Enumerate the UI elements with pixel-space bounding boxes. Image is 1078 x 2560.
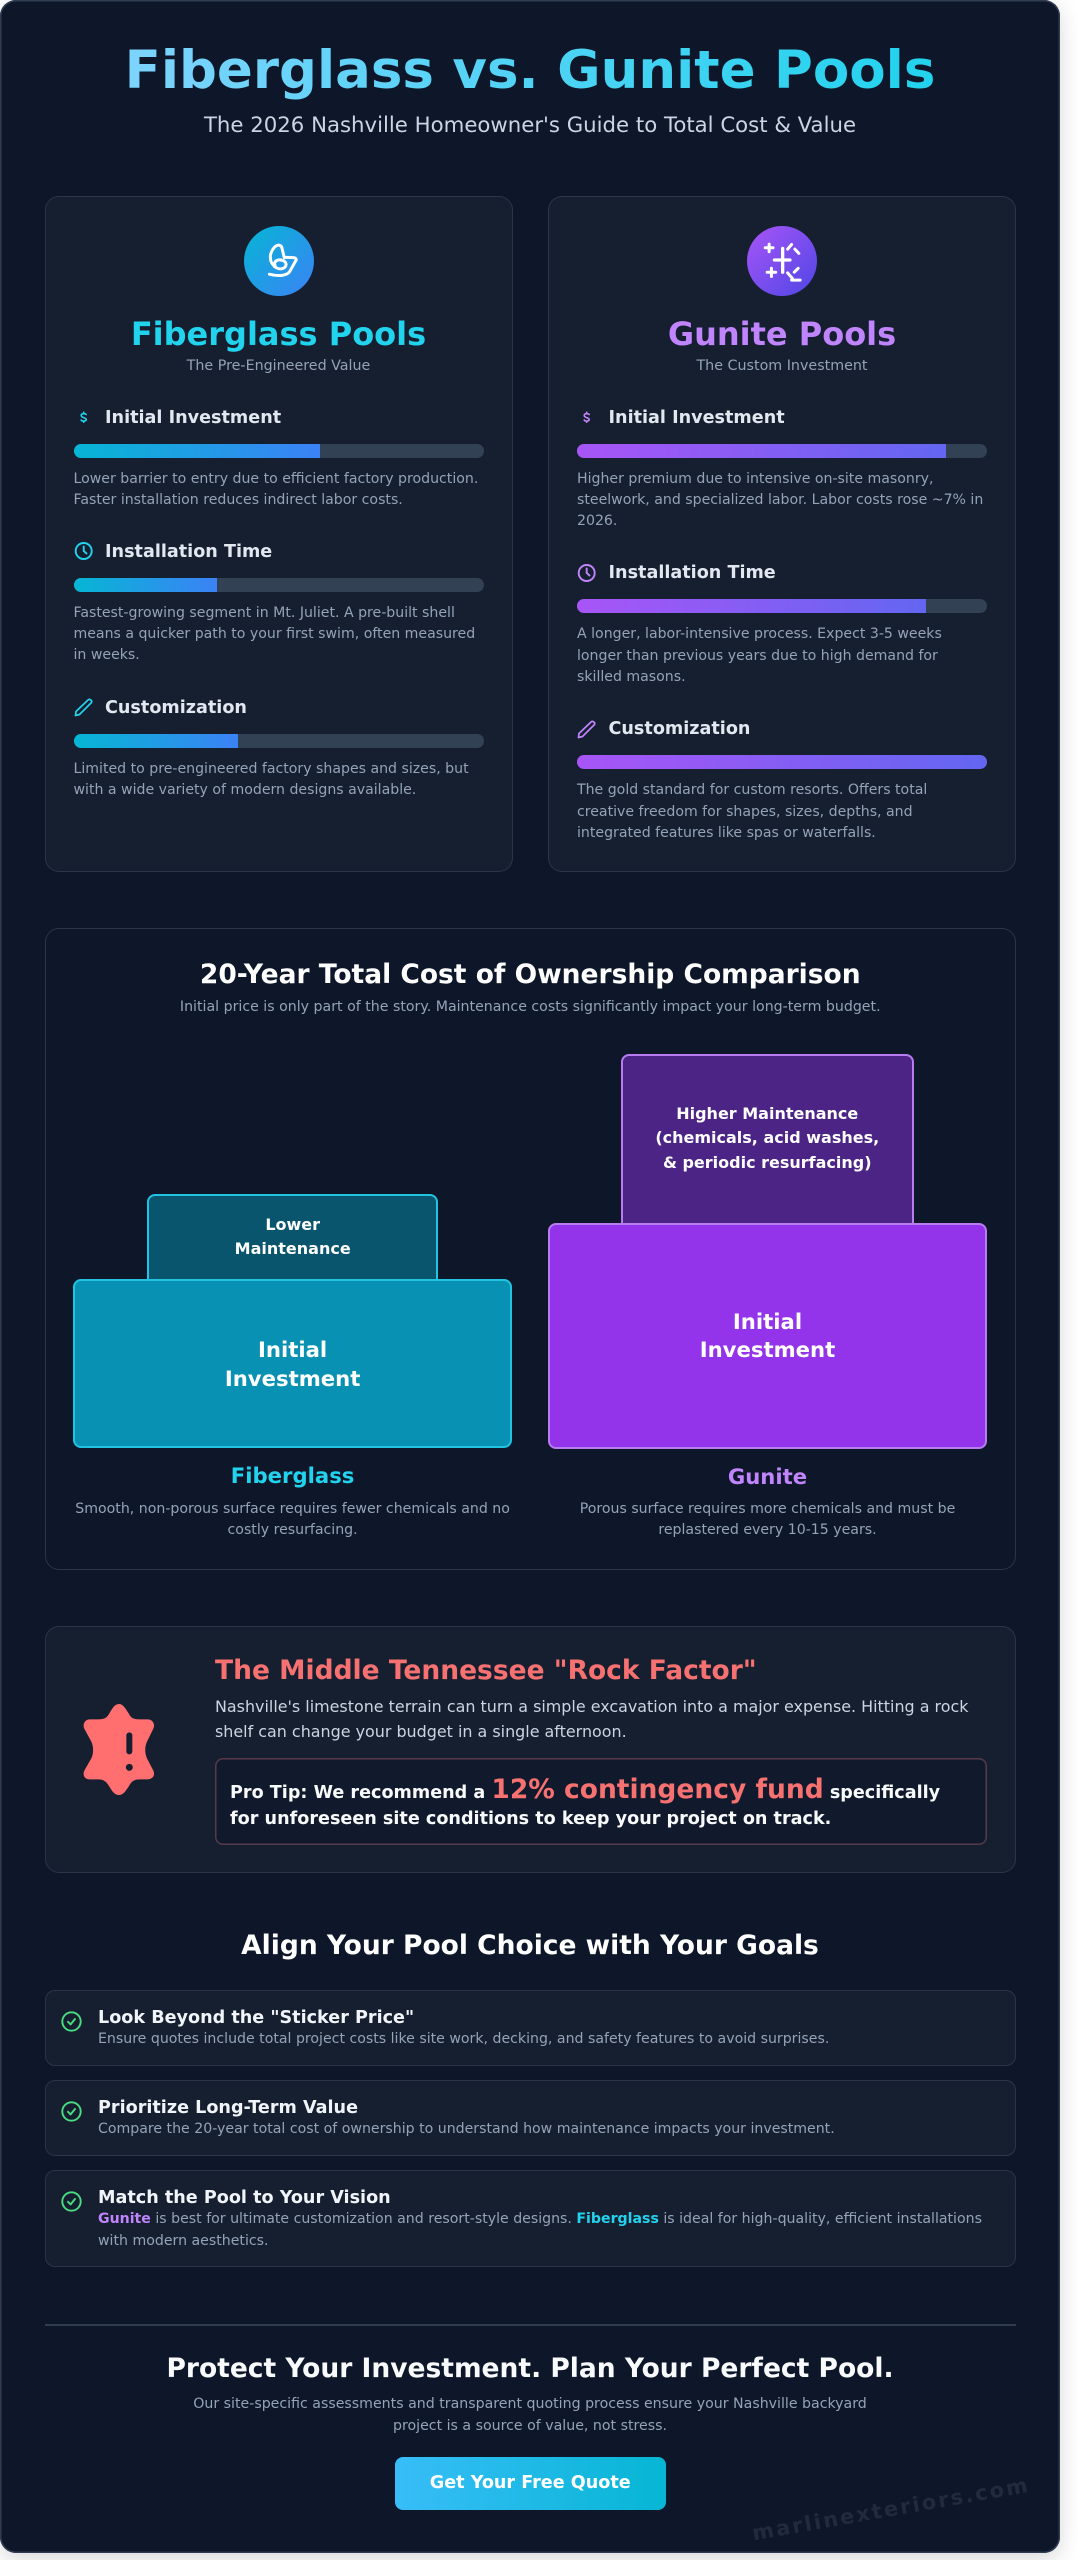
description: means a quicker path to your first swim, often measured: [74, 626, 475, 642]
heading: rock factor: The Middle Tennessee "Rock Factor": [215, 1655, 757, 1686]
block: higher maintenance: (chemicals, acid washes,: [655, 1128, 879, 1147]
panel: fiberglass pools: [44, 196, 512, 872]
footer description: [193, 2396, 867, 2434]
icon: dollar: [583, 411, 590, 423]
watermark: marlinexteriors.com: [750, 2473, 1032, 2545]
block: higher maintenance: Higher Maintenance: [676, 1104, 858, 1123]
metric: installation time: [577, 563, 987, 685]
footer description: Our site-specific assessments and transparent quoting process ensure your Nashville backyard: [193, 2396, 867, 2412]
checklist item: match the pool: [44, 2170, 1016, 2267]
subtitle: The 2026 Nashville Homeowner's Guide to Total Cost & Value: [204, 112, 856, 138]
icon: pencil: [578, 720, 596, 738]
checklist item: long-term value: Compare the 20-year total cost of ownership to understand how maintenance impacts your investment.: [98, 2121, 835, 2137]
block: initial investment: Investment: [225, 1366, 360, 1391]
description: skilled masons.: [577, 669, 686, 685]
block: initial investment: Investment: [700, 1337, 835, 1362]
block: initial investment: Initial: [258, 1337, 327, 1362]
description: [576, 782, 927, 841]
panel: gunite pools: [548, 196, 1016, 872]
checklist item: match the pool: Gunite is best for ultimate customization and resort-style designs. Fiberglass is ideal for high-quality, efficient installations: [98, 2211, 982, 2227]
button: get your free quote: [394, 2457, 666, 2510]
panel: 20-year total cost comparison: [44, 928, 1016, 1570]
bar: 35 percent: [74, 578, 484, 592]
description: Faster installation reduces indirect labor costs.: [74, 492, 403, 508]
description: fiberglass: Smooth, non-porous surface requires fewer chemicals and no: [75, 1501, 510, 1517]
description: The gold standard for custom resorts. Offers total: [577, 782, 927, 798]
block: lower maintenance: Lower: [265, 1215, 320, 1234]
block: initial investment: [548, 1223, 987, 1449]
description: [577, 626, 942, 685]
heading: comparison: 20-Year Total Cost of Ownership Comparison: [200, 959, 861, 990]
description: Lower barrier to entry due to efficient factory production.: [74, 471, 478, 487]
metric: installation time: Installation Time: [105, 542, 272, 562]
description: in weeks.: [74, 647, 140, 663]
icon: clock: [74, 542, 93, 560]
icon: pencil: [74, 698, 93, 716]
bar: 40 percent: [74, 734, 484, 748]
description: fiberglass: costly resurfacing.: [228, 1522, 358, 1538]
heading: protect your investment: Protect Your Investment. Plan Your Perfect Pool.: [166, 2353, 894, 2384]
bar: 100 percent: [577, 755, 987, 769]
rock factor description: shelf can change your budget in a single afternoon.: [215, 1722, 627, 1741]
description: [74, 761, 469, 798]
metric: initial investment: [74, 408, 484, 508]
description: gunite: replastered every 10-15 years.: [658, 1522, 877, 1538]
rock factor description: [215, 1697, 968, 1741]
description: Higher premium due to intensive on-site masonry,: [577, 471, 933, 487]
rock factor description: Nashville's limestone terrain can turn a simple excavation into a major expense. Hitting a rock: [215, 1697, 968, 1716]
metric: customization: Customization: [608, 719, 750, 739]
checklist item: sticker price: [44, 1990, 1016, 2066]
callout: pro tip: for unforeseen site conditions to keep your project on track.: [230, 1808, 831, 1828]
block: initial investment: Initial: [733, 1309, 802, 1334]
description: longer than previous years due to high demand for: [577, 648, 938, 664]
bar: 90 percent: [577, 444, 987, 458]
divider: [44, 2324, 1016, 2326]
metric: initial investment: Initial Investment: [608, 408, 785, 428]
block: initial investment: [73, 1279, 512, 1448]
description: [74, 605, 475, 663]
button: get your free quote: Get Your Free Quote: [430, 2473, 631, 2493]
heading: align your pool choice: Align Your Pool Choice with Your Goals: [241, 1930, 819, 1961]
footer description: project is a source of value, not stress.: [393, 2418, 667, 2434]
icon: fiberglass pool: [244, 226, 314, 296]
block: higher maintenance: & periodic resurfacing): [663, 1153, 872, 1172]
block: higher maintenance: [621, 1054, 914, 1228]
icon: alert badge: [84, 1704, 154, 1795]
checklist item: long-term value: Prioritize Long-Term Value: [98, 2098, 358, 2118]
metric: customization: [74, 698, 484, 798]
checklist item: long-term value: [44, 2080, 1016, 2156]
heading: gunite pools: Gunite Pools: [668, 315, 896, 353]
label: gunite: Gunite: [728, 1464, 807, 1489]
callout: pro tip: Pro Tip: We recommend a 12% contingency fund specifically: [230, 1774, 940, 1804]
icon: clock: [578, 564, 596, 582]
bar: 60 percent: [74, 444, 484, 458]
description: Limited to pre-engineered factory shapes and sizes, but: [74, 761, 469, 777]
title: Fiberglass vs. Gunite Pools: [125, 40, 935, 101]
icon: dollar: [80, 411, 87, 423]
comparison intro: Initial price is only part of the story. Maintenance costs significantly impact your long-term budget.: [180, 999, 881, 1015]
chart column: fiberglass: [73, 1194, 512, 1538]
description: fiberglass: [75, 1501, 510, 1538]
description: [577, 471, 983, 529]
metric: initial investment: [577, 408, 987, 529]
tagline: The Custom Investment: [696, 358, 868, 374]
heading: fiberglass pools: Fiberglass Pools: [131, 315, 426, 353]
chart column: gunite: [548, 1054, 987, 1538]
bar: 85 percent: [577, 599, 987, 613]
metric: customization: Customization: [105, 698, 247, 718]
icon: check: [61, 2191, 82, 2212]
checklist item: sticker price: Ensure quotes include total project costs like site work, decking, and safety features to avoid surprises.: [98, 2031, 829, 2047]
tagline: The Pre-Engineered Value: [187, 358, 370, 374]
icon: check: [61, 2011, 82, 2032]
description: with a wide variety of modern designs available.: [74, 782, 416, 798]
description: steelwork, and specialized labor. Labor costs rose ~7% in: [577, 492, 983, 508]
checklist item: match the pool: Match the Pool to Your Vision: [98, 2188, 391, 2208]
block: lower maintenance: [147, 1194, 438, 1284]
description: [74, 471, 478, 508]
description: A longer, labor-intensive process. Expect 3-5 weeks: [577, 626, 942, 642]
metric: initial investment: Initial Investment: [105, 408, 281, 428]
block: lower maintenance: Maintenance: [235, 1239, 351, 1258]
description: creative freedom for shapes, sizes, depths, and: [577, 804, 913, 820]
metric: installation time: Installation Time: [608, 563, 776, 583]
description: gunite: [580, 1501, 955, 1538]
checklist item: sticker price: Look Beyond the "Sticker Price": [98, 2008, 414, 2028]
description: Fastest-growing segment in Mt. Juliet. A pre-built shell: [74, 605, 455, 621]
description: gunite: Porous surface requires more chemicals and must be: [580, 1501, 955, 1517]
callout: pro tip: [215, 1758, 986, 1845]
metric: installation time: [74, 542, 484, 663]
icon: check: [61, 2101, 82, 2122]
metric: customization: [576, 719, 987, 841]
checklist item: match the pool: with modern aesthetics.: [98, 2233, 268, 2249]
icon: gunite pool: [747, 226, 817, 296]
description: integrated features like spas or waterfalls.: [577, 825, 876, 841]
label: fiberglass: Fiberglass: [231, 1463, 354, 1488]
description: 2026.: [577, 513, 617, 529]
panel: rock factor: [44, 1626, 1016, 1873]
